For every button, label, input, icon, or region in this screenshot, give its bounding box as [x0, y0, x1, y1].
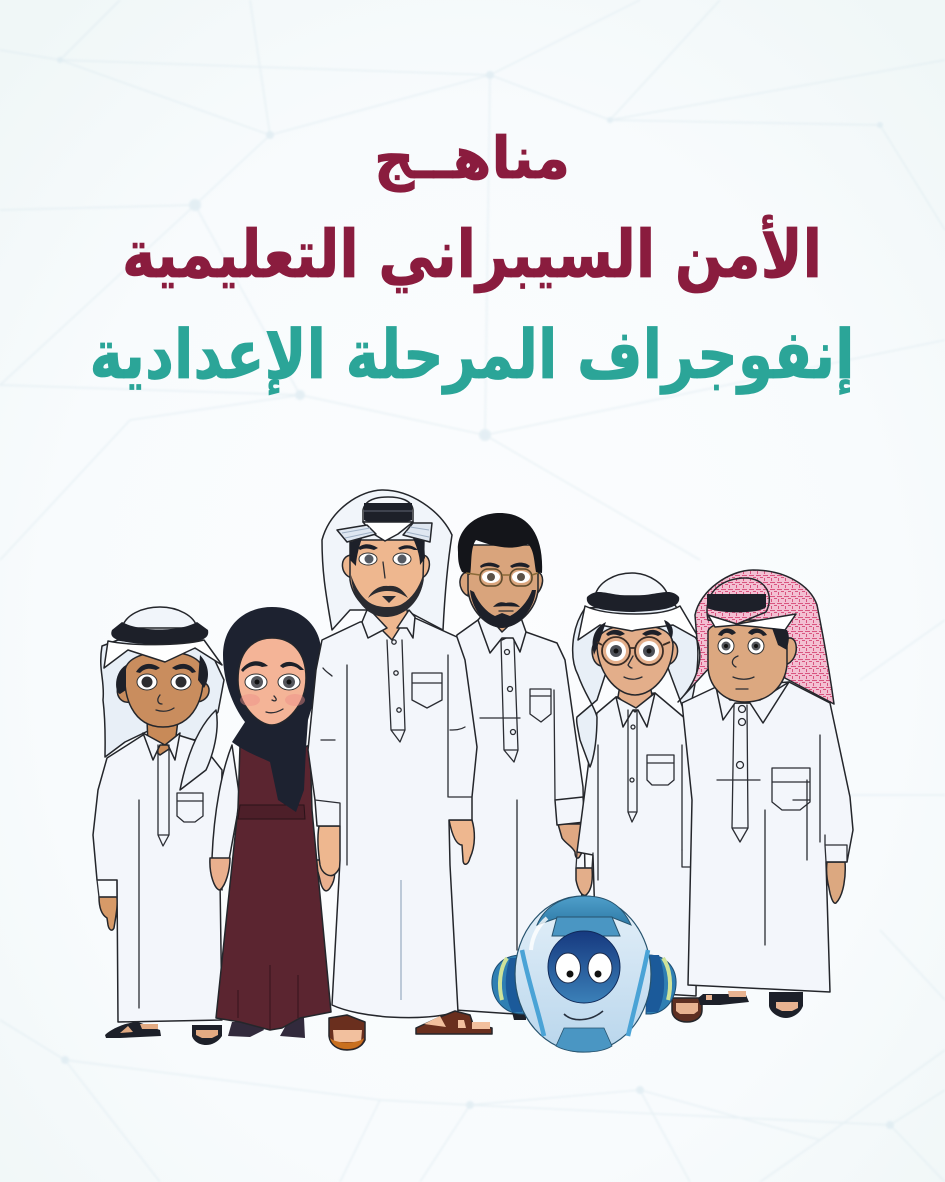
sandal: red shemagh boy left: [698, 994, 749, 1005]
nose and mouth: [732, 656, 754, 689]
face: [597, 625, 673, 695]
sandal left foot: [333, 1030, 362, 1042]
cuff: [555, 797, 585, 825]
collar: [362, 610, 415, 638]
hair: [458, 513, 542, 575]
character: girl: [210, 607, 335, 1038]
placket buttons: [504, 650, 516, 734]
robe: [577, 693, 702, 996]
ear: [785, 638, 796, 665]
head cloth around egal: [707, 578, 769, 624]
ears: [592, 640, 678, 666]
sandal left: [105, 1022, 161, 1038]
right hand: [683, 868, 697, 896]
sandal left: [329, 1015, 365, 1050]
eyes: [136, 664, 196, 690]
character: man center: [308, 490, 492, 1050]
pocket: [177, 793, 203, 822]
dress: [216, 745, 331, 1030]
cuff: [97, 880, 117, 897]
robe: [308, 618, 477, 1018]
robot eyes: [556, 953, 612, 983]
egal: [111, 622, 208, 645]
sleeve line: [554, 690, 555, 800]
egal: [587, 592, 679, 612]
placket: [480, 640, 520, 950]
beard: [351, 575, 423, 617]
foot: red shemagh boy left: [706, 991, 746, 1000]
right hand: [827, 862, 845, 903]
placket buttons: [630, 725, 635, 782]
shemagh: [678, 570, 834, 704]
dress folds: [238, 965, 298, 1030]
pocket: [772, 768, 810, 810]
shoes: [228, 1018, 305, 1038]
hair: [350, 536, 425, 566]
robot smile: [564, 1011, 603, 1020]
title: line 1: مناهــج: [374, 124, 570, 193]
robe: [682, 682, 853, 992]
body: [515, 896, 651, 1052]
cap: [595, 573, 668, 596]
eyes and glasses: [466, 563, 538, 586]
body stripes: [522, 950, 648, 1036]
cuff: [825, 835, 847, 862]
ghutra flap: [180, 710, 217, 790]
nose: [383, 562, 385, 578]
placket: [598, 710, 682, 880]
character: boy with red shemagh: [678, 570, 853, 992]
neck: [618, 685, 652, 712]
character: boy left: [93, 607, 224, 1045]
left hand: [99, 897, 117, 930]
beard: [470, 590, 536, 628]
soul patch: [382, 596, 396, 603]
left hand: [318, 826, 349, 876]
hijab: [223, 607, 321, 812]
hair: [772, 628, 789, 650]
pocket: [530, 689, 551, 722]
placket: [139, 745, 169, 1008]
placket buttons: [392, 640, 401, 712]
sandal left sole: [330, 1038, 364, 1049]
eyes and glasses: [597, 630, 670, 665]
collar: [478, 612, 526, 653]
character: boy with glasses: [573, 573, 702, 996]
neck: [368, 600, 408, 640]
sleeve and fold lines: [321, 655, 465, 865]
moustache: [493, 602, 520, 607]
pocket: [412, 673, 442, 708]
bottom hatch: [556, 1028, 612, 1052]
left sleeve: [212, 745, 240, 860]
headband: [578, 606, 700, 640]
right ear: [646, 955, 676, 1014]
robe: [440, 620, 585, 1015]
belt: [238, 805, 305, 819]
face: [708, 620, 787, 702]
headband: [337, 522, 432, 542]
ghutra back: [322, 490, 452, 630]
right hand: [315, 860, 335, 891]
headband: [104, 640, 222, 668]
ears: [117, 682, 209, 702]
eyes: [718, 628, 767, 654]
left hand: [576, 868, 592, 895]
face: [125, 652, 203, 727]
left hand: [210, 858, 230, 890]
eyes: [241, 661, 304, 690]
right hand: [558, 824, 585, 858]
collar: [616, 693, 655, 727]
sandal: boy with glasses: [672, 998, 702, 1022]
placket buttons: [736, 706, 746, 768]
nose and mouth: [624, 656, 642, 679]
face: [468, 545, 538, 627]
sandal right: [416, 1011, 492, 1034]
right hand behind: [211, 862, 222, 890]
character: man with glasses: [440, 513, 585, 1020]
robe: [93, 735, 222, 1022]
nose and mouth: [266, 696, 283, 713]
face: [350, 540, 424, 615]
sandals of right boys: [672, 991, 803, 1022]
eyes: [358, 544, 418, 565]
right hand: [449, 820, 474, 864]
ears: [460, 572, 543, 596]
placket: [387, 640, 405, 742]
collar: [143, 733, 180, 760]
pocket: [647, 755, 674, 785]
ghutra: [573, 605, 698, 767]
neck: [147, 720, 178, 755]
cuffs: [576, 850, 701, 868]
neck: [482, 605, 522, 640]
ghutra back: [101, 640, 224, 757]
top hatch: [537, 896, 631, 925]
collar: [716, 682, 789, 723]
foot: red shemagh boy right: [776, 1002, 798, 1011]
robe centre line: [765, 780, 807, 945]
sandal right foot: [424, 1016, 490, 1029]
moustache: [368, 586, 408, 598]
hair: [592, 620, 675, 655]
headband: [708, 614, 796, 630]
face screen: [548, 931, 620, 1003]
sandal: [512, 1012, 526, 1020]
blush: [240, 694, 305, 706]
placket: [717, 705, 820, 842]
cap: [122, 607, 197, 628]
face: [238, 638, 306, 725]
sandal: red shemagh boy right: [769, 992, 803, 1018]
sandal right: [192, 1025, 222, 1045]
egal: [363, 497, 413, 523]
cuffs: [315, 797, 472, 826]
foot: boy with glasses: [676, 1003, 698, 1014]
ears: [342, 555, 429, 578]
title: line 2: الأمن السيبراني التعليمية: [122, 214, 822, 293]
robot: [492, 896, 676, 1052]
left ear: [492, 955, 524, 1014]
egal: [707, 594, 766, 612]
highlight: [531, 918, 547, 950]
hair: [116, 655, 208, 694]
sandal left foot: [120, 1024, 158, 1033]
nose and mouth: [156, 695, 174, 711]
neck and chin shadow: [725, 690, 775, 703]
sandal right foot: [196, 1030, 218, 1038]
